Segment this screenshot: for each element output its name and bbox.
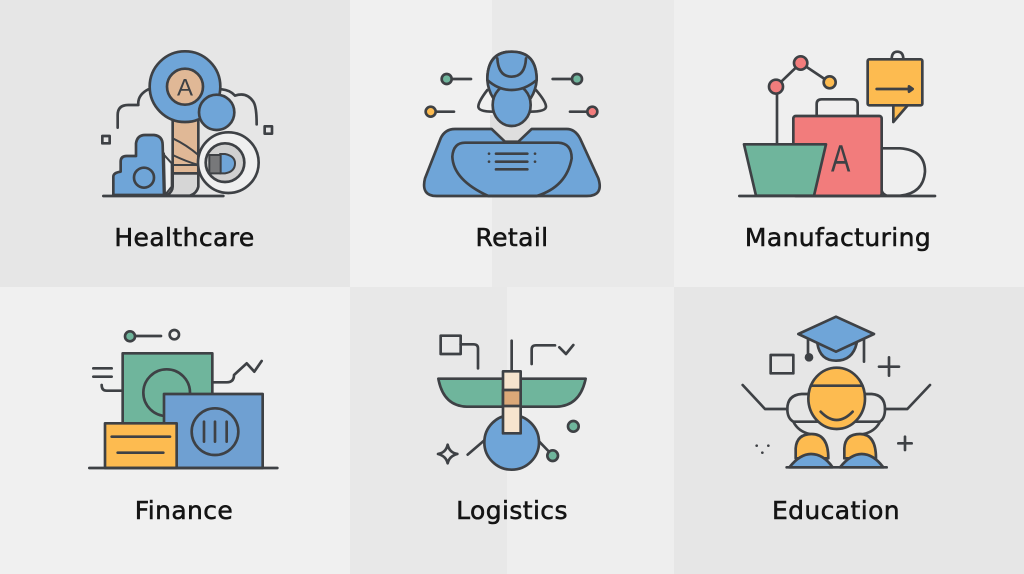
panel: manufacturing [739,52,935,252]
icon: healthcare: A [177,74,193,101]
label: Logistics: Logistics [456,496,568,525]
icon: manufacturing: A [831,138,851,181]
label: Education: Education [772,496,900,525]
panel: education [743,317,930,525]
panel: logistics [438,336,586,525]
icon: logistics [438,336,586,470]
icon: education [743,317,930,467]
label: Healthcare: Healthcare [114,223,255,252]
label: Finance: Finance [135,496,233,525]
icon: retail [424,52,600,196]
icon: healthcare [102,51,272,196]
panel: finance [89,330,277,525]
neck shadow [490,115,530,145]
label: Manufacturing: Manufacturing [745,223,931,252]
icon: manufacturing [739,52,935,196]
panel: retail [424,52,600,252]
panel: healthcare [102,51,272,252]
icon: finance [89,330,277,468]
label: Retail: Retail [475,223,549,252]
